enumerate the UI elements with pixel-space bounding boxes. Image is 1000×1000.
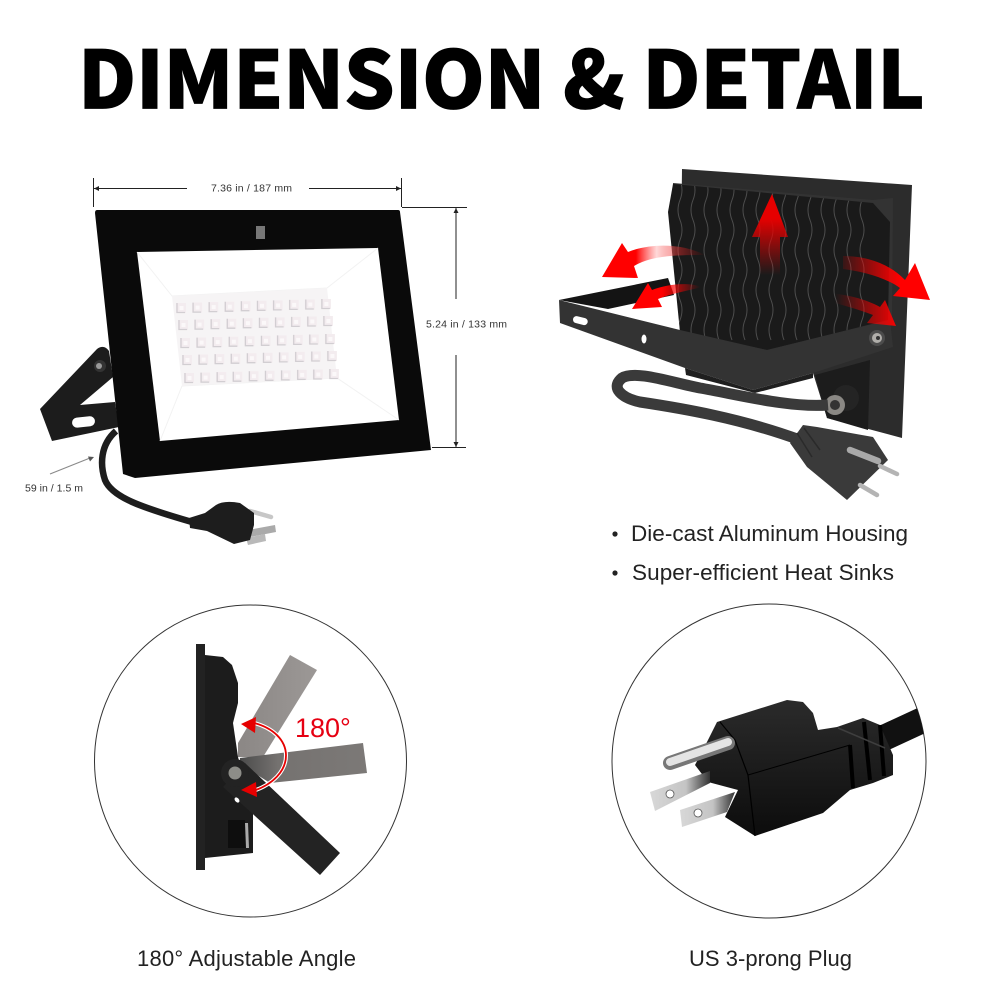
dimension: height: 5.24 in / 133 mm	[426, 318, 507, 330]
front power cord	[102, 431, 192, 522]
panel: US plug circle	[612, 604, 940, 918]
rear power cord	[617, 375, 828, 440]
U bracket	[559, 278, 893, 393]
side view housing	[196, 644, 253, 870]
dimension: cord length: 59 in / 1.5 m	[25, 482, 83, 494]
cable	[881, 708, 924, 750]
label: US plug: US 3-prong Plug	[689, 946, 852, 971]
flat blade 1	[650, 771, 710, 811]
strain relief ribs	[850, 722, 884, 788]
horizontal grey arm	[240, 743, 367, 783]
panel: adjustable angle circle	[94, 605, 406, 917]
dimension: width	[94, 178, 402, 207]
label: adjustable angle: 180° Adjustable Angle	[137, 946, 356, 971]
floodlight mounting bracket	[40, 347, 119, 441]
rear plug	[790, 425, 897, 500]
cord gland	[815, 360, 870, 430]
panel: feature bullets: Super-efficient Heat Sinks	[632, 560, 894, 585]
black arm	[221, 759, 340, 875]
angle label: 180°	[295, 713, 351, 743]
plug body	[695, 700, 893, 836]
dimension: width: 7.36 in / 187 mm	[211, 182, 292, 194]
panel: feature bullets: Die-cast Aluminum Housing	[631, 521, 908, 546]
dimension: cord length	[25, 456, 94, 494]
heat sink fins	[668, 180, 893, 350]
pivot bolt	[869, 330, 885, 346]
title: DIMENSION & DETAIL	[78, 16, 925, 132]
panel: rear view heat sink	[559, 169, 930, 500]
panel: front view with dimensions	[25, 178, 507, 545]
raised grey arm	[238, 655, 317, 757]
LED array	[172, 288, 339, 386]
front plug	[189, 502, 276, 545]
floodlight frame	[95, 210, 431, 478]
ground prong	[670, 742, 728, 763]
flat blade 2	[680, 792, 735, 827]
red heat arrows	[602, 194, 930, 326]
panel: feature bullets	[612, 521, 908, 585]
white lens panel	[137, 248, 399, 441]
dimension: height	[402, 208, 507, 448]
red rotation arrow	[241, 717, 286, 797]
back plate	[680, 169, 912, 438]
